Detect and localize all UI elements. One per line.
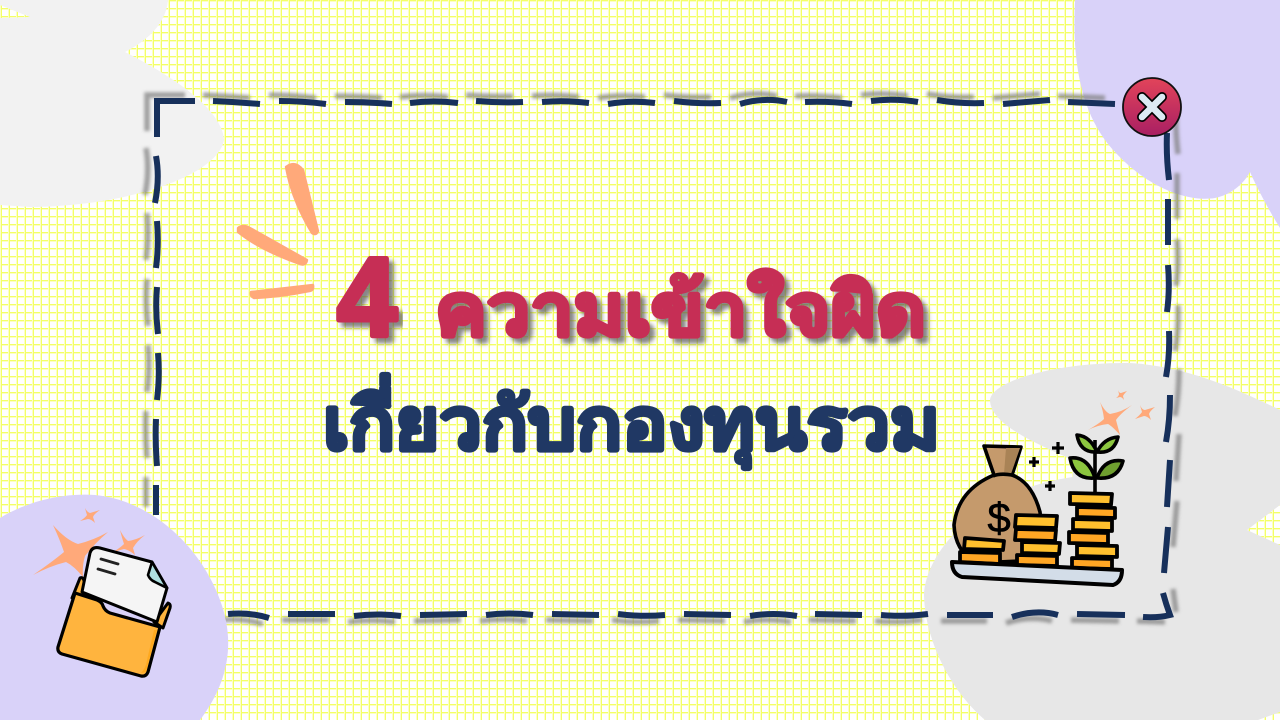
plus marks	[1029, 442, 1064, 491]
blob: bottom-right gray	[924, 363, 1280, 720]
icon: folder with document	[33, 508, 170, 676]
frame shadow	[145, 94, 1179, 624]
frame dashes	[155, 100, 1170, 618]
folder front	[58, 593, 160, 676]
title line 2: เกี่ยวกับกองทุนรวม	[323, 373, 940, 470]
bag	[954, 446, 1045, 563]
close button	[1123, 78, 1181, 136]
sparkles	[1088, 390, 1155, 435]
sparkles	[33, 508, 145, 577]
blob: top-left gray	[0, 0, 224, 207]
title line 1: number: 4	[337, 235, 397, 360]
blob: top-right purple	[1074, 0, 1280, 228]
dashed frame	[145, 94, 1179, 624]
document	[82, 548, 167, 622]
title line 1: text: ความเข้าใจผิด	[435, 268, 926, 351]
tray	[952, 562, 1122, 585]
blob: bottom-left purple	[0, 495, 228, 720]
icon: money bag, coins and plant	[952, 390, 1155, 585]
folder back	[72, 578, 170, 628]
dollar sign: $	[987, 494, 1011, 541]
coins	[960, 493, 1117, 569]
burst rays	[238, 164, 318, 298]
plant	[1093, 440, 1097, 492]
